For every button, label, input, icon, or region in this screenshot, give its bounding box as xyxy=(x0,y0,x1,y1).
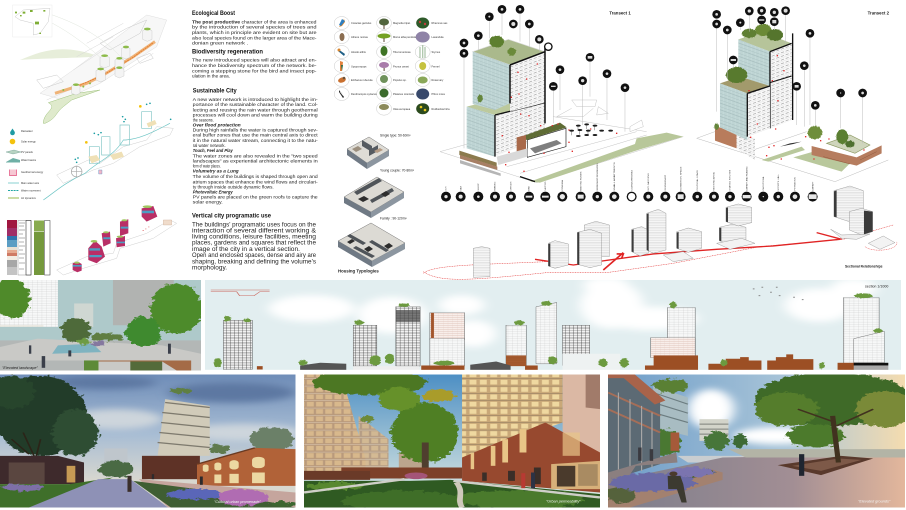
legend labels xyxy=(21,129,44,200)
key plan xyxy=(211,290,270,296)
single type plan xyxy=(347,137,389,169)
ground plane and plaza xyxy=(440,100,683,183)
species labels: Prunus cerasi xyxy=(393,64,409,68)
text block: vertical city: shaping, breaking and defining the volume's xyxy=(192,258,316,266)
text block: vertical city: image of the city in a vertical section. xyxy=(192,246,300,253)
legend labels: CAFETERIA xyxy=(762,176,765,191)
legend labels: OFFICES xyxy=(511,181,513,191)
brick buildings xyxy=(257,354,888,370)
species labels: Stymus xyxy=(432,50,441,54)
species labels xyxy=(351,21,450,111)
text block: sustainable city: The volume of the buildings is shaped through open and xyxy=(193,174,318,179)
roof trees xyxy=(477,36,516,102)
species labels: Fennel xyxy=(432,64,440,68)
text block: sustainable city: the seasons. xyxy=(193,117,214,122)
legend labels: Water movement xyxy=(21,188,41,192)
young couple plan xyxy=(344,177,404,218)
housing labels: Young couple: 70-80m² xyxy=(380,168,415,172)
text block: sustainable city: Volumetry as a Lung xyxy=(193,169,239,174)
legend labels: Geothermal energy xyxy=(21,170,44,174)
title: Sectional Relationships: Sectional Relationships xyxy=(845,265,883,269)
icon: air dynamics xyxy=(8,197,19,199)
text block: sustainable city: A new water network is introduced to highlight the im- xyxy=(193,97,318,102)
text block: sustainable city: Touch, Feel and Play xyxy=(193,148,233,153)
legend labels: PV panels xyxy=(21,150,34,154)
section models xyxy=(473,186,895,277)
legend labels: BAR xyxy=(459,186,462,191)
building: upper tower xyxy=(738,32,793,128)
legend labels: MEETING AREA xyxy=(713,172,716,191)
scale note: section 1/1000 xyxy=(865,284,888,288)
text block: ecological boost: by the introduction of several species of trees and xyxy=(192,25,317,30)
text block: sustainable city: The water zones are also revealed in the "two speed xyxy=(193,153,318,158)
species labels: Rudbeckia hirta xyxy=(432,107,450,111)
leader lines xyxy=(717,14,863,143)
legend labels: PARKING xyxy=(494,181,497,191)
housing labels: Single type: 50-60m² xyxy=(380,134,411,138)
bird illustrations xyxy=(337,19,347,98)
text block: sustainable city: eral buffer zones that use the main central axis to direct xyxy=(193,133,318,138)
legend labels: EXHIBITION SPACE xyxy=(679,166,682,191)
panel: city section xyxy=(205,280,901,370)
species labels: Athene noctua xyxy=(351,35,368,39)
programme markers xyxy=(502,63,617,172)
species icons xyxy=(334,16,430,115)
legend labels: COWORKING xyxy=(631,170,633,191)
icon: PV panels xyxy=(6,150,21,154)
species labels: Phlox moss xyxy=(432,92,446,96)
species labels: Rosemary xyxy=(432,78,444,82)
text block: sustainable city: atrium spaces that enhance the wind flows and circulari- xyxy=(193,179,318,184)
text block: vertical city: Open and enclosed spaces, dense and airy are xyxy=(192,252,317,259)
legend labels: SHOP xyxy=(478,183,480,191)
legend labels: SKY GARDENS xyxy=(647,173,650,191)
panel: concept text column xyxy=(192,11,318,271)
species labels: Alcedo atthis xyxy=(351,50,367,54)
text block: sustainable city: ty through inside outside dynamic flows. xyxy=(193,184,274,189)
legend labels: METRO xyxy=(545,181,547,191)
legend labels: Solar energy xyxy=(21,140,36,144)
text block: sustainable city: form of water places. xyxy=(193,163,221,168)
text block: sustainable city: it in the natural water stream, connecting it to the natu- xyxy=(193,138,318,143)
plaza tables xyxy=(569,123,613,137)
panel: transect 1 axonometric xyxy=(440,5,683,183)
inset location map xyxy=(13,5,52,37)
icon: geothermal energy xyxy=(10,170,16,176)
building: upper tower xyxy=(473,39,545,123)
text block: vertical city: living conditions, leisure facilities, meeting xyxy=(192,233,316,240)
species labels: Morus alba pendula xyxy=(393,35,416,39)
red connection lines xyxy=(423,225,897,279)
legend labels: Water basins xyxy=(21,158,37,162)
water network axonometric xyxy=(43,102,173,200)
heading: Vertical city programatic use: Vertical city programatic use xyxy=(192,214,272,220)
text block: biodiversity: ulation in the area. xyxy=(192,74,230,79)
text block: vertical city: The buildings' programatic uses focus on the xyxy=(192,221,317,228)
plant illustrations xyxy=(378,18,430,114)
panel: site plans column xyxy=(6,5,177,275)
title: Transect 1: Transect 1 xyxy=(609,10,631,15)
photo: urban permeability xyxy=(304,374,600,508)
species labels: Lavandula xyxy=(432,35,444,39)
annex with green roof xyxy=(497,123,567,165)
caption: cultural promenade: "Cultural urban promenade" xyxy=(214,500,261,504)
building: lower tower xyxy=(720,77,770,140)
photo: elevated landscape xyxy=(0,280,201,370)
legend labels xyxy=(446,162,814,191)
caption: elevated grounds: "Elevated grounds" xyxy=(858,500,891,504)
species labels: Olea europaea xyxy=(393,107,411,111)
text block: biodiversity xyxy=(192,58,317,79)
icon: water movement xyxy=(8,190,19,192)
species labels: Tilia tomentosa xyxy=(393,50,411,54)
text block: ecological boost: The post productive character of the area is enhanced xyxy=(192,19,317,24)
icon: rainwater drop xyxy=(10,128,15,135)
panel: transect 2 axonometric xyxy=(697,6,890,182)
text block: sustainable city xyxy=(193,97,318,205)
housing labels xyxy=(338,134,415,274)
legend: energy and water xyxy=(6,128,44,200)
icon: solar energy xyxy=(10,139,15,144)
text block: sustainable city: During high rainfalls the water is captured through sev- xyxy=(193,128,318,133)
programme bars xyxy=(7,220,50,275)
text block: vertical city xyxy=(192,221,317,272)
text block: biodiversity: The new introduced species will also attract and en- xyxy=(192,58,317,63)
text block: ecological boost: also local species found on the larger area of the Mace- xyxy=(192,35,317,40)
panel: sectional relationships xyxy=(423,186,897,279)
text block: sustainable city: processes will cool down and warm the building during xyxy=(193,112,318,117)
text block: sustainable city: Over flood protection xyxy=(193,122,241,127)
text block: biodiversity: hance the biodiversity spectrum of the network. be- xyxy=(192,63,317,68)
family plan xyxy=(338,223,405,267)
title: Transect 2: Transect 2 xyxy=(868,10,890,15)
programmatic axonometric xyxy=(57,205,177,275)
leader lines xyxy=(464,13,625,148)
legend labels: Main water axis xyxy=(21,181,40,185)
text block: sustainable city: PV panels are placed on the green roofs to capture the xyxy=(193,195,318,200)
heading: Ecological Boost: Ecological Boost xyxy=(192,11,235,17)
legend labels: BIKE xyxy=(529,185,531,191)
building: low brick pavilion xyxy=(812,135,882,166)
building: brick base xyxy=(715,126,737,148)
legend labels: SHARED KITCHEN xyxy=(729,170,732,191)
legend labels: WORKSHOP RESIDENCES xyxy=(597,163,599,191)
legend icons xyxy=(441,192,818,202)
heading: Sustainable City: Sustainable City xyxy=(193,89,237,95)
legend labels: LIBRARY xyxy=(811,181,814,191)
building dark shading xyxy=(548,190,873,267)
clouds xyxy=(268,277,877,347)
legend labels: WI-FI xyxy=(446,186,448,191)
legend labels: Rainwater xyxy=(21,129,33,133)
section buildings xyxy=(223,298,884,369)
icon markers xyxy=(712,6,867,110)
icon markers xyxy=(460,5,629,92)
photo: elevated grounds xyxy=(608,374,905,508)
text block: sustainable city: landscapes" as experiential architectonic elements in xyxy=(193,158,318,163)
text block: vertical city: interaction of several different working & xyxy=(192,227,316,234)
building: podium floors xyxy=(737,133,755,160)
caption: elevated landscape: "Elevated landscape" xyxy=(2,366,38,370)
species labels: Magnolia tripet. xyxy=(393,21,411,25)
text block: sustainable city: lecting and reusing the rain water through geothermal xyxy=(193,108,318,112)
icon: water basins xyxy=(6,158,20,162)
species labels: Dendrocopos syriacus xyxy=(351,92,377,96)
legend labels: Air dynamics xyxy=(21,196,37,200)
section trees xyxy=(214,293,883,369)
species labels: Platanus orientalis xyxy=(393,92,415,96)
species labels: Rhamnus sax. xyxy=(432,21,448,25)
legend labels: CULTURAL SPACE xyxy=(696,169,699,191)
birds xyxy=(753,287,804,300)
text block: sustainable city: Photovoltaic Energy xyxy=(193,189,233,194)
legend labels: SMALL APARTMENTS xyxy=(613,162,616,191)
text block: ecological boost xyxy=(192,19,317,46)
icon: network lines xyxy=(8,182,19,184)
text block: ecological boost: donian green network . xyxy=(192,41,248,46)
housing labels: Family : 90-120m² xyxy=(380,216,407,220)
building: lower block xyxy=(459,97,545,176)
panel: species catalogue xyxy=(334,16,450,115)
species labels: Coracias garrulus xyxy=(351,21,372,25)
text block: biodiversity: coming a stepping stone for the bird and insect pop- xyxy=(192,68,317,73)
text block: vertical city: places, gardens and squares that reflect the xyxy=(192,239,317,246)
legend labels: RESTAURANT xyxy=(664,174,667,191)
legend labels: SPORTS HALL xyxy=(777,173,780,191)
photo: brick pavilion view xyxy=(0,374,296,508)
panel: programme icon legend strip xyxy=(441,162,818,202)
text block: sustainable city: ral water network. xyxy=(193,143,226,148)
legend labels: CINEMA xyxy=(561,179,564,191)
species labels: Populus sp. xyxy=(393,78,407,82)
caption: urban permeability: "Urban permeability" xyxy=(546,500,581,504)
text block: sustainable city: solar energy. xyxy=(193,200,223,205)
text block: sustainable city: portance of the sustainable character of the land. Col- xyxy=(193,102,318,107)
trees xyxy=(714,24,855,147)
programme markers xyxy=(748,55,865,160)
species labels: Erithacus rubecula xyxy=(351,78,373,82)
species labels: Upupa epops xyxy=(351,64,367,68)
legend labels: LIBRARY AND READING xyxy=(745,166,748,191)
housing labels: Housing Typologies xyxy=(338,268,379,274)
text block: ecological boost: plants, which in principle are evident on site but are xyxy=(192,30,317,35)
ground plane xyxy=(697,127,888,182)
site axonometric map xyxy=(13,8,167,123)
legend labels: MEETING ROOMS xyxy=(580,171,582,191)
text block: vertical city: morphology. xyxy=(192,264,227,272)
panel: housing typologies xyxy=(338,134,415,274)
legend labels: FITNESS xyxy=(795,176,797,191)
heading: Biodiversity regeneration: Biodiversity regeneration xyxy=(192,50,263,56)
